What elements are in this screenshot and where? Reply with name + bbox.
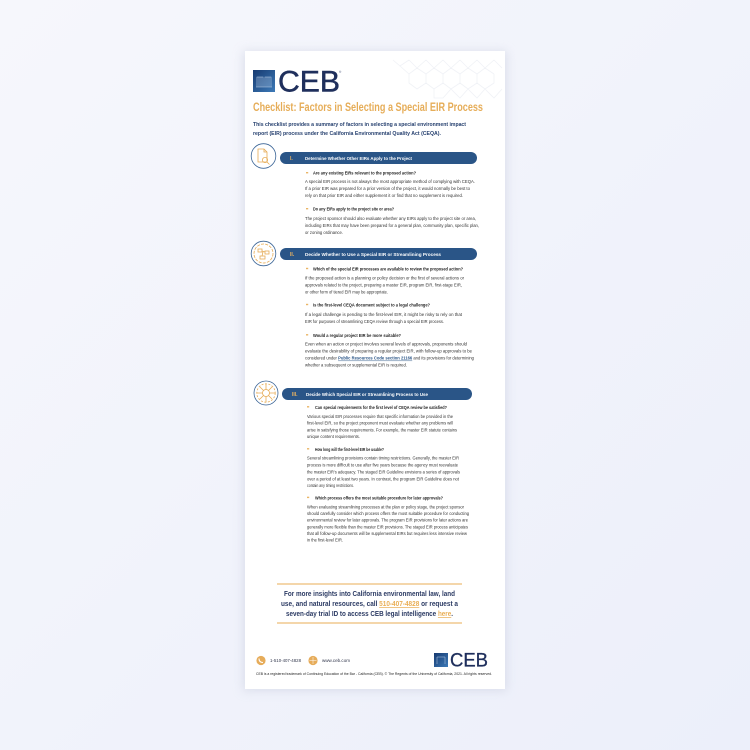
icon: process network xyxy=(251,241,276,266)
checklist item: existing EIRs: Are any existing EIRs relevant to the proposed action? xyxy=(313,171,416,176)
checklist item: which processes xyxy=(305,266,464,294)
checklist item: project site: including EIRs that may have been prepared for a general plan, community plan, specific plan, xyxy=(305,223,479,228)
checklist item: project site xyxy=(305,207,479,235)
checklist item: project site: Do any EIRs apply to the project site or area? xyxy=(313,207,394,212)
icon: document with magnifier xyxy=(251,144,276,168)
footer: phone contact xyxy=(256,656,301,665)
logo: CEB header xyxy=(253,66,342,98)
checklist item: existing EIRs: rely on that prior EIR and either supplement it or find that no supplement is required. xyxy=(305,193,463,198)
checklist item: how long usable: Several streamlining provisions contain timing restrictions. Generally, the master EIR xyxy=(307,455,460,460)
checklist item: most suitable procedure: that all follow-up documents will be supplemental EIRs but requires less intensive review xyxy=(307,531,468,536)
checklist item: how long usable: process is more difficult to use after five years because the agency must reevaluate xyxy=(307,463,458,468)
checklist item: most suitable procedure: in the first-level EIR. xyxy=(307,537,343,542)
callout: more insights: seven-day trial ID to access CEB legal intelligence here. xyxy=(286,609,453,618)
intro text: This checklist provides a summary of factors in selecting a special environment impact xyxy=(253,122,466,128)
heading bar: section II: II. xyxy=(290,252,295,258)
checklist item: most suitable procedure xyxy=(307,495,469,542)
checklist item: regular project EIR: whether a subsequent or supplemental EIR is required. xyxy=(305,363,407,368)
checklist item: regular project EIR: Even when an action or project involves several levels of approvals, proponents should xyxy=(305,342,467,347)
heading bar: section III: Decide Which Special EIR or Streamlining Process to Use xyxy=(306,392,428,397)
heading bar: section III xyxy=(282,388,472,400)
callout: more insights: use, and natural resources, call 510-407-4828 or request a xyxy=(281,599,459,608)
logo: CEB footer: CEB xyxy=(450,650,488,672)
heading bar: section I xyxy=(280,152,477,164)
checklist item: most suitable procedure: environmental review for later approvals. The program EIR provisions for later actions are xyxy=(307,518,468,523)
panel: section II xyxy=(251,241,477,368)
checklist item: special requirements: unique content requirements. xyxy=(307,434,360,439)
callout: more insights xyxy=(277,584,462,624)
checklist item: regular project EIR: Would a regular project EIR be more suitable? xyxy=(313,333,401,338)
checklist item: regular project EIR: evaluate the desirability of preparing a regular project EIR, with follow-up approvals to be xyxy=(305,349,472,354)
checklist item: which processes: If the proposed action is a planning or policy decision or the first of several actions or xyxy=(305,275,464,280)
checklist item: which processes: Which of the special EIR processes are available to review the proposed action? xyxy=(313,266,463,272)
checklist item: existing EIRs: A special EIR process is not always the most appropriate method of complying with CEQA. xyxy=(305,179,475,184)
checklist item: special requirements xyxy=(307,405,458,439)
footer: website xyxy=(308,656,350,665)
intro text: report (EIR) process under the California Environmental Quality Act (CEQA). xyxy=(253,131,442,137)
checklist item: which processes: or other form of tiered EIR may be appropriate. xyxy=(305,290,388,294)
logo: CEB header: CEB xyxy=(278,66,340,98)
icon: radial process xyxy=(254,381,278,405)
checklist item: how long usable: contain any timing restrictions. xyxy=(307,483,354,488)
checklist item: most suitable procedure: Which process offers the most suitable procedure for later approvals? xyxy=(315,495,443,500)
checklist item: most suitable procedure: should carefully consider which process offers the most suitable procedure for conducting xyxy=(307,511,469,516)
panel: section III xyxy=(254,381,472,542)
heading bar: section II xyxy=(280,248,477,260)
heading bar: section I: Determine Whether Other EIRs Apply to the Project xyxy=(305,156,412,161)
title: Checklist: Factors in Selecting a Special EIR Process xyxy=(253,100,483,114)
checklist item: how long usable: How long will the first-level EIR be usable? xyxy=(315,447,384,452)
checklist item: how long usable: the master EIR's adequacy. The staged EIR Guideline envisions a series of approvals xyxy=(307,470,461,475)
heading bar: section II: Decide Whether to Use a Special EIR or Streamlining Process xyxy=(305,252,441,257)
checklist item: legal challenge xyxy=(305,302,463,324)
footer: legal notice: CEB is a registered trademark of Continuing Education of the Bar - California (CEB). © The Regents of the University of California, 2021. All rights reserved. xyxy=(256,672,492,676)
checklist item: project site: or zoning ordinance. xyxy=(305,230,343,235)
checklist item: how long usable: over a period of at least two years. In contrast, the program EIR Guideline does not xyxy=(307,476,460,481)
checklist item: special requirements: first-level EIR, so the project proponent must evaluate whether any problems will xyxy=(307,421,453,426)
checklist item: which processes: approvals related to the project, preparing a master EIR, program EIR, first-stage EIR, xyxy=(305,282,462,287)
checklist item: legal challenge: EIR for purposes of streamlining CEQA review through a special EIR process. xyxy=(305,319,444,324)
checklist item: regular project EIR: considered under Public Resources Code section 21166 and its provisions for determining xyxy=(305,356,474,361)
checklist item: special requirements: Can special requirements for the first level of CEQA review be satisfied? xyxy=(315,405,447,410)
checklist item: project site: The project sponsor should also evaluate whether any EIRs apply to the project site or area, xyxy=(305,216,476,221)
heading bar: section I: I. xyxy=(290,156,293,162)
checklist item: how long usable xyxy=(307,447,461,488)
checklist item: special requirements: arise in satisfying those requirements. For example, the master EIR statute contains xyxy=(307,427,458,432)
panel: section I xyxy=(251,144,479,235)
footer: website: www.ceb.com xyxy=(322,658,350,663)
checklist item: regular project EIR xyxy=(305,333,474,368)
checklist item: existing EIRs: If a prior EIR was prepared for a prior version of the project, it would normally be best to xyxy=(305,186,470,191)
checklist item: most suitable procedure: generally more flexible than the master EIR provisions. The staged EIR process anticipates xyxy=(307,524,469,529)
checklist item: legal challenge: Is the first-level CEQA document subject to a legal challenge? xyxy=(313,302,430,308)
panel: checklist page xyxy=(245,51,505,689)
checklist item: existing EIRs xyxy=(305,171,475,198)
heading bar: section III: III. xyxy=(292,392,298,398)
intro text xyxy=(253,122,466,137)
logo: CEB header: ® xyxy=(339,70,342,74)
checklist item: most suitable procedure: When evaluating streamlining processes at the plan or policy stage, the project sponsor xyxy=(307,504,464,509)
logo: CEB footer xyxy=(434,650,488,672)
checklist item: special requirements: Various special EIR processes require that specific information be provided in the xyxy=(307,414,453,419)
callout: more insights: For more insights into California environmental law, land xyxy=(284,589,455,598)
footer: phone contact: 1-510-407-4828 xyxy=(270,658,301,663)
checklist item: legal challenge: If a legal challenge is pending to the first-level EIR, it might be risky to rely on that xyxy=(305,312,463,317)
